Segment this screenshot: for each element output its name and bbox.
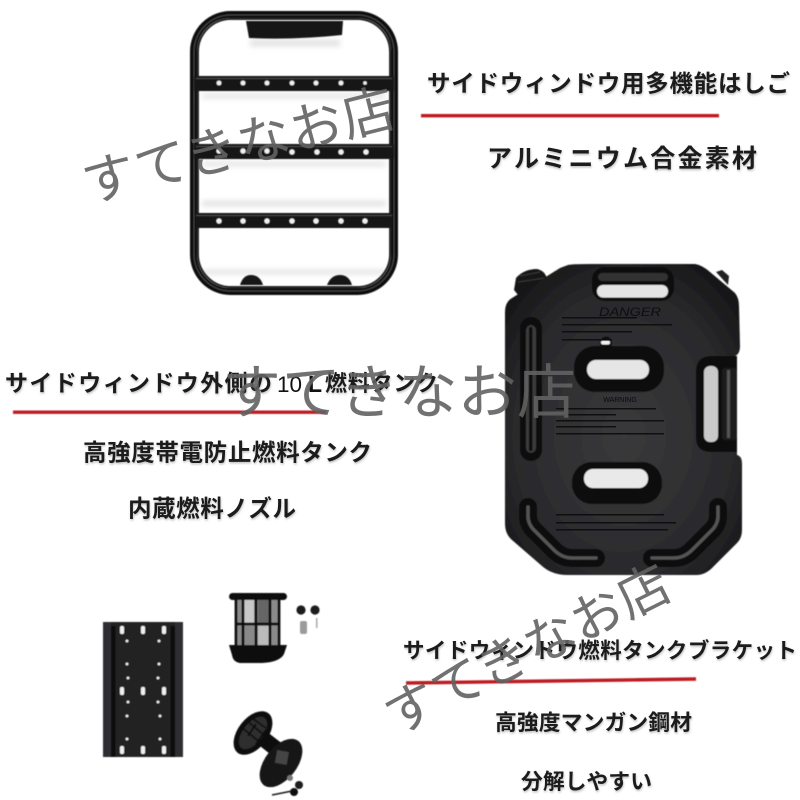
watermark 1: すてきなお店: [76, 79, 401, 215]
heading: bracket: サイドウィンドウ燃料タンクブラケット: [403, 638, 797, 663]
text: antistatic tank: 高強度帯電防止燃料タンク: [83, 440, 372, 466]
fuel cap photo: [226, 704, 311, 796]
bracket plate photo: [103, 622, 183, 757]
ladder rack photo: [194, 14, 394, 292]
tank embossed label: DANGER: [599, 305, 661, 319]
fuel tank photo: [505, 264, 742, 575]
filter basket photo: [229, 593, 287, 663]
heading: 10L tank: サイドウィンドウ外側の: [5, 370, 272, 396]
watermark 3: すてきなお店: [375, 555, 680, 747]
keys and lock: [296, 605, 320, 634]
red underline: bracket: [406, 679, 696, 683]
watermark 2: すてきなお店: [222, 360, 576, 426]
text: easy to disassemble: 分解しやすい: [521, 769, 652, 794]
text: manganese steel: 高強度マンガン鋼材: [495, 710, 692, 735]
tank embossed label: WARNING: [603, 397, 637, 404]
red underline: ladder: [421, 114, 719, 117]
heading: 10L tank: 燃料タンク: [325, 371, 438, 396]
heading: ladder: サイドウィンドウ用多機能はしご: [427, 70, 790, 96]
text: built-in nozzle: 内蔵燃料ノズル: [128, 494, 296, 522]
red underline: tank: [13, 410, 326, 414]
tank embossed label: [556, 305, 676, 530]
heading: 10L tank: [5, 370, 438, 397]
text: aluminium material: アルミニウム合金素材: [487, 145, 757, 173]
heading: 10L tank: L: [308, 371, 322, 397]
heading: 10L tank: 10: [277, 372, 302, 397]
